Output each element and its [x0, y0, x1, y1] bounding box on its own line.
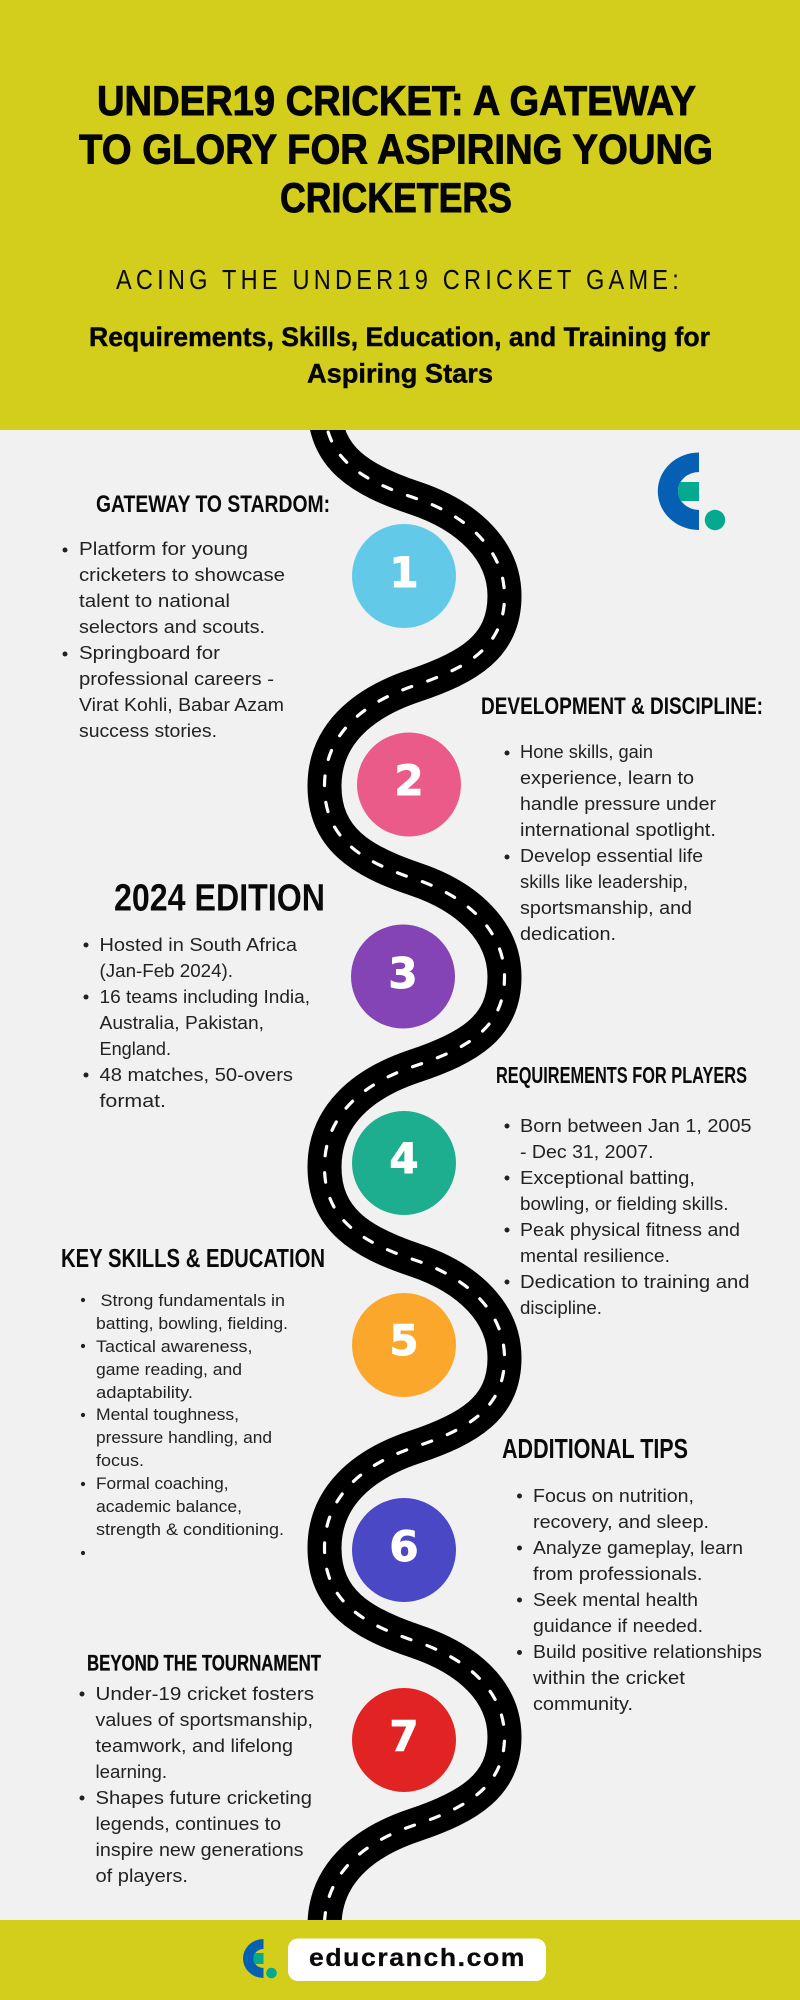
bullet list: adaptability.	[96, 1383, 193, 1402]
bullet list	[84, 934, 310, 1111]
bullet list	[517, 1485, 762, 1714]
bullet list: experience, learn to	[520, 767, 694, 788]
bullet list: within the cricket	[532, 1667, 685, 1688]
bullet list: of players.	[96, 1865, 188, 1886]
bullet list: legends, continues to	[96, 1813, 281, 1834]
bullet list: community.	[533, 1693, 633, 1714]
bullet list: Formal coaching,	[96, 1474, 228, 1493]
subtitle: ACING THE UNDER19 CRICKET GAME:	[116, 264, 683, 295]
bullet list	[504, 741, 716, 944]
bullet list: international spotlight.	[520, 819, 716, 840]
bullet list: skills like leadership,	[520, 871, 688, 892]
bullet list: 16 teams including India,	[100, 986, 310, 1007]
bullet list: sportsmanship, and	[520, 897, 692, 918]
footer band	[0, 1920, 800, 2000]
bullet list: dedication.	[520, 923, 616, 944]
step 3 circle	[351, 924, 455, 1028]
bullet list: learning.	[96, 1761, 167, 1782]
bullet list: recovery, and sleep.	[533, 1511, 709, 1532]
bullet list	[504, 1115, 752, 1318]
heading: BEYOND THE TOURNAMENT	[87, 1650, 321, 1676]
bullet list: batting, bowling, fielding.	[96, 1314, 288, 1333]
step 6 circle	[352, 1498, 456, 1602]
bullet list: Peak physical fitness and	[520, 1219, 740, 1240]
bullet list: Dedication to training and	[520, 1271, 750, 1292]
footer logo	[243, 1939, 277, 1978]
step 5 circle	[352, 1293, 456, 1397]
bullet list: Tactical awareness,	[96, 1337, 252, 1356]
bullet list: - Dec 31, 2007.	[520, 1141, 654, 1162]
bullet list: Australia, Pakistan,	[100, 1012, 264, 1033]
bullet list: Springboard for	[79, 642, 220, 663]
step 1 circle: 1	[389, 548, 419, 597]
step 2 circle: 2	[394, 756, 424, 805]
step 4 circle: 4	[389, 1134, 419, 1183]
heading: KEY SKILLS & EDUCATION	[61, 1243, 325, 1273]
heading: ADDITIONAL TIPS	[502, 1433, 688, 1464]
bullet list: from professionals.	[533, 1563, 702, 1584]
bullet list: Mental toughness,	[96, 1405, 239, 1424]
bullet list: values of sportsmanship,	[96, 1709, 313, 1730]
bullet list: Shapes future cricketing	[96, 1787, 312, 1808]
title	[79, 77, 713, 221]
bullet list: bowling, or fielding skills.	[520, 1193, 728, 1214]
bullet list: Born between Jan 1, 2005	[520, 1115, 752, 1136]
bullet list: Hone skills, gain	[520, 741, 653, 762]
heading: GATEWAY TO STARDOM:	[96, 491, 330, 518]
subheading	[89, 322, 710, 388]
bullet list: Under-19 cricket fosters	[96, 1683, 314, 1704]
bullet list: Platform for young	[79, 538, 248, 559]
logo: educranch mark	[658, 452, 725, 530]
title: CRICKETERS	[280, 174, 512, 221]
website pill	[288, 1938, 546, 1981]
bullet list: discipline.	[520, 1297, 602, 1318]
bullet list: Virat Kohli, Babar Azam	[79, 694, 284, 715]
bullet list: format.	[100, 1090, 166, 1111]
bullet list: cricketers to showcase	[79, 564, 285, 585]
bullet list: strength & conditioning.	[96, 1520, 284, 1539]
bullet list: 48 matches, 50-overs	[100, 1064, 293, 1085]
bullet list: academic balance,	[96, 1497, 242, 1516]
bullet list: Build positive relationships	[533, 1641, 762, 1662]
bullet list: success stories.	[79, 720, 217, 741]
bullet list	[62, 538, 285, 741]
bullet list: professional careers -	[79, 668, 274, 689]
subheading: Requirements, Skills, Education, and Training for	[89, 322, 710, 352]
bullet list: Develop essential life	[520, 845, 703, 866]
title: UNDER19 CRICKET: A GATEWAY	[97, 77, 696, 124]
bullet list: (Jan-Feb 2024).	[100, 960, 233, 981]
step 5 circle: 5	[389, 1316, 419, 1365]
panel: gateway to stardom	[62, 491, 330, 741]
bullet list: Strong fundamentals in	[100, 1291, 285, 1310]
step 3 circle: 3	[388, 949, 418, 998]
step 4 circle	[352, 1111, 456, 1215]
bullet list: Analyze gameplay, learn	[533, 1537, 743, 1558]
bullet list: Seek mental health	[533, 1589, 698, 1610]
step 6 circle: 6	[389, 1522, 419, 1571]
step 7 circle	[352, 1688, 456, 1792]
bullet list: game reading, and	[96, 1360, 242, 1379]
bullet list: England.	[100, 1038, 171, 1059]
bullet list: inspire new generations	[96, 1839, 304, 1860]
title: TO GLORY FOR ASPIRING YOUNG	[79, 126, 713, 172]
bullet list: handle pressure under	[520, 793, 716, 814]
panel: development and discipline	[481, 693, 763, 944]
heading: 2024 EDITION	[114, 878, 325, 920]
bullet list: focus.	[96, 1451, 144, 1470]
panel: beyond the tournament	[80, 1650, 321, 1886]
step 1 circle	[352, 524, 456, 628]
bullet list	[80, 1683, 314, 1886]
bullet list: pressure handling, and	[96, 1428, 272, 1447]
panel: 2024 edition	[84, 878, 325, 1111]
panel: requirements for players	[496, 1062, 752, 1318]
bullet list: Hosted in South Africa	[100, 934, 298, 955]
header banner	[0, 0, 800, 430]
bullet list: Focus on nutrition,	[533, 1485, 694, 1506]
step 7 circle: 7	[389, 1712, 419, 1761]
step 2 circle	[357, 732, 461, 836]
bullet list	[81, 1291, 288, 1555]
bullet list: Exceptional batting,	[520, 1167, 695, 1188]
bullet list: teamwork, and lifelong	[96, 1735, 293, 1756]
bullet list: selectors and scouts.	[79, 616, 265, 637]
bullet list: mental resilience.	[520, 1245, 670, 1266]
bullet list: guidance if needed.	[533, 1615, 703, 1636]
panel: additional tips	[502, 1433, 762, 1714]
panel: key skills and education	[61, 1243, 325, 1555]
subheading: Aspiring Stars	[307, 358, 493, 388]
website pill: educranch.com	[309, 1944, 526, 1972]
bullet list: talent to national	[79, 590, 230, 611]
winding road	[324, 406, 504, 1926]
